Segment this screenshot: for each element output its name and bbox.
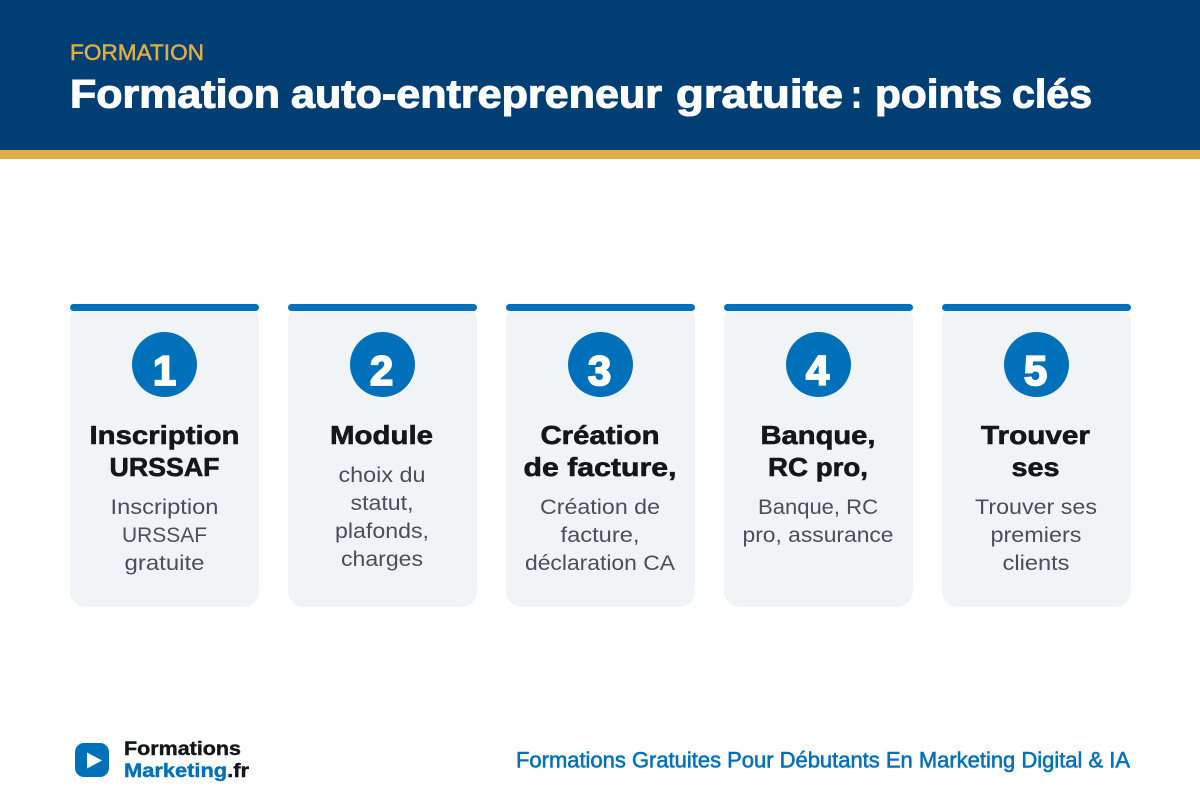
number badge 2: 2	[370, 347, 393, 394]
number badge 1	[132, 332, 197, 397]
card 1 description: URSSAF	[122, 523, 207, 547]
card 2 description	[335, 463, 429, 571]
card 2 heading: Module	[330, 420, 433, 450]
title: gratuite	[676, 72, 843, 116]
title: clés	[1012, 72, 1092, 116]
card 3 heading: Création	[540, 420, 660, 450]
icon: play button	[75, 743, 109, 777]
number badge 5	[1004, 332, 1069, 397]
number badge 5: 5	[1024, 347, 1047, 394]
card 1 description	[110, 495, 218, 575]
title: points	[875, 72, 1002, 116]
card 2 description: choix du	[338, 463, 426, 487]
card 2 description: plafonds,	[335, 519, 429, 543]
card 3 heading: de facture,	[524, 452, 676, 482]
number badge 3: 3	[588, 347, 611, 394]
card 4 description: Banque, RC	[758, 495, 878, 519]
title: auto-entrepreneur	[291, 72, 662, 116]
card 1 heading	[90, 420, 240, 482]
panel: card 3	[506, 304, 695, 607]
logo wordmark: Formations	[124, 739, 241, 760]
tagline: Formations Gratuites Pour Débutants En Marketing Digital & IA	[516, 748, 1130, 772]
card 1 description: gratuite	[124, 551, 204, 575]
panel: card 1	[70, 304, 259, 607]
card 5 heading: Trouver	[981, 420, 1090, 450]
card 2 description: statut,	[350, 491, 414, 515]
card 3 description: déclaration CA	[525, 551, 676, 575]
card 2 description: charges	[341, 547, 423, 571]
number badge 4	[786, 332, 851, 397]
card 3 heading	[524, 420, 676, 482]
logo wordmark: Marketing .fr	[124, 761, 250, 782]
card 4 description	[742, 495, 894, 547]
card 5 heading: ses	[1012, 452, 1060, 482]
header banner	[0, 0, 1200, 159]
card 5 description: premiers	[990, 523, 1082, 547]
card 4 description: pro, assurance	[742, 523, 894, 547]
number badge 2	[350, 332, 415, 397]
card 5 description: clients	[1002, 551, 1070, 575]
logo wordmark	[124, 739, 250, 782]
panel: card 2	[288, 304, 477, 607]
card 3 description: facture,	[560, 523, 640, 547]
card 3 description	[525, 495, 676, 575]
panel: card 5	[942, 304, 1131, 607]
number badge 4: 4	[806, 347, 830, 394]
eyebrow label: FORMATION	[70, 40, 204, 65]
card 1 heading: URSSAF	[110, 452, 220, 482]
title: :	[851, 72, 862, 116]
number badge 1: 1	[153, 347, 176, 394]
logo	[75, 739, 250, 782]
card 3 description: Création de	[540, 495, 660, 519]
card 1 description: Inscription	[110, 495, 218, 519]
panel: card 4	[724, 304, 913, 607]
card 4 heading	[760, 420, 876, 482]
card 5 description	[975, 495, 1097, 575]
number badge 3	[568, 332, 633, 397]
title: Formation	[70, 72, 280, 116]
card 4 heading: Banque,	[760, 420, 876, 450]
card 5 heading	[981, 420, 1090, 482]
card 4 heading: RC pro,	[768, 452, 868, 482]
card 5 description: Trouver ses	[975, 495, 1097, 519]
card 1 heading: Inscription	[90, 420, 240, 450]
